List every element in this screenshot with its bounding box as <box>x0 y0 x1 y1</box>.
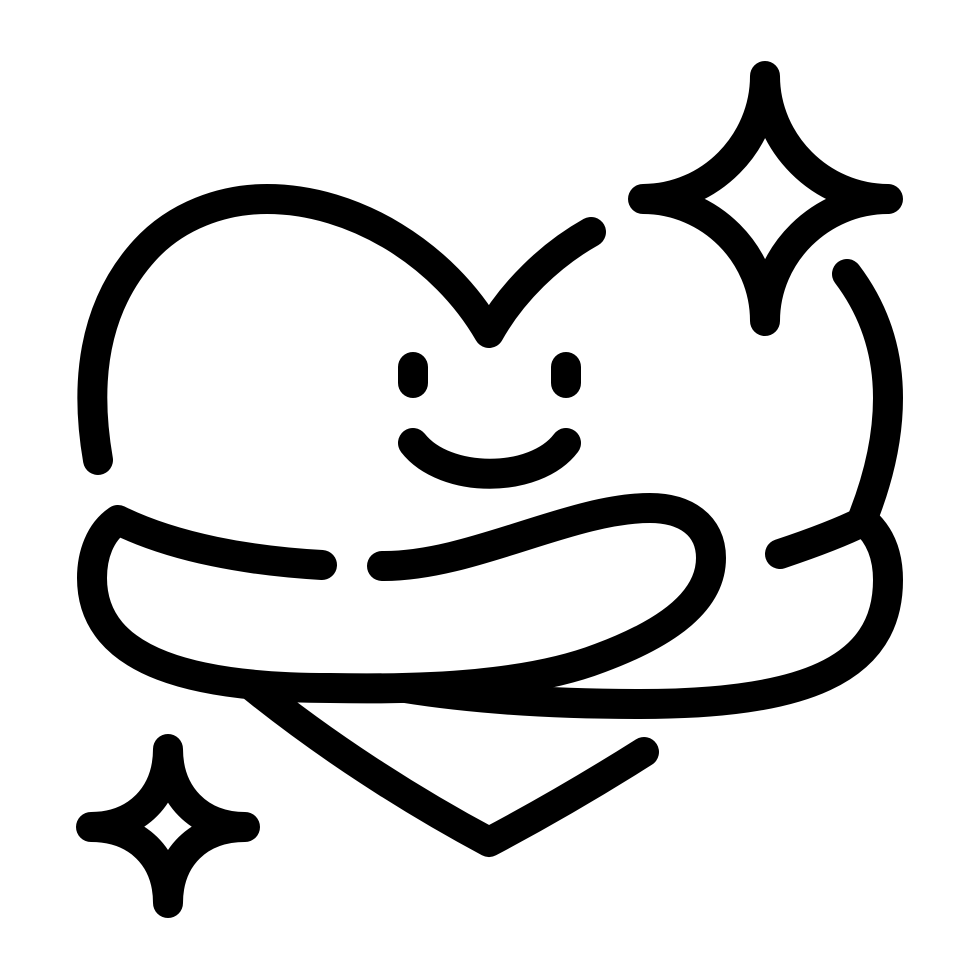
face <box>413 367 566 474</box>
hugging arms <box>92 508 888 704</box>
large sparkle <box>643 76 888 321</box>
heart bottom point <box>252 686 644 842</box>
left eye <box>398 367 428 383</box>
small sparkle <box>91 749 245 903</box>
heart top outline <box>92 199 888 520</box>
left arm <box>92 508 711 688</box>
smile <box>413 443 566 474</box>
right eye <box>551 367 581 383</box>
right arm <box>405 521 888 704</box>
